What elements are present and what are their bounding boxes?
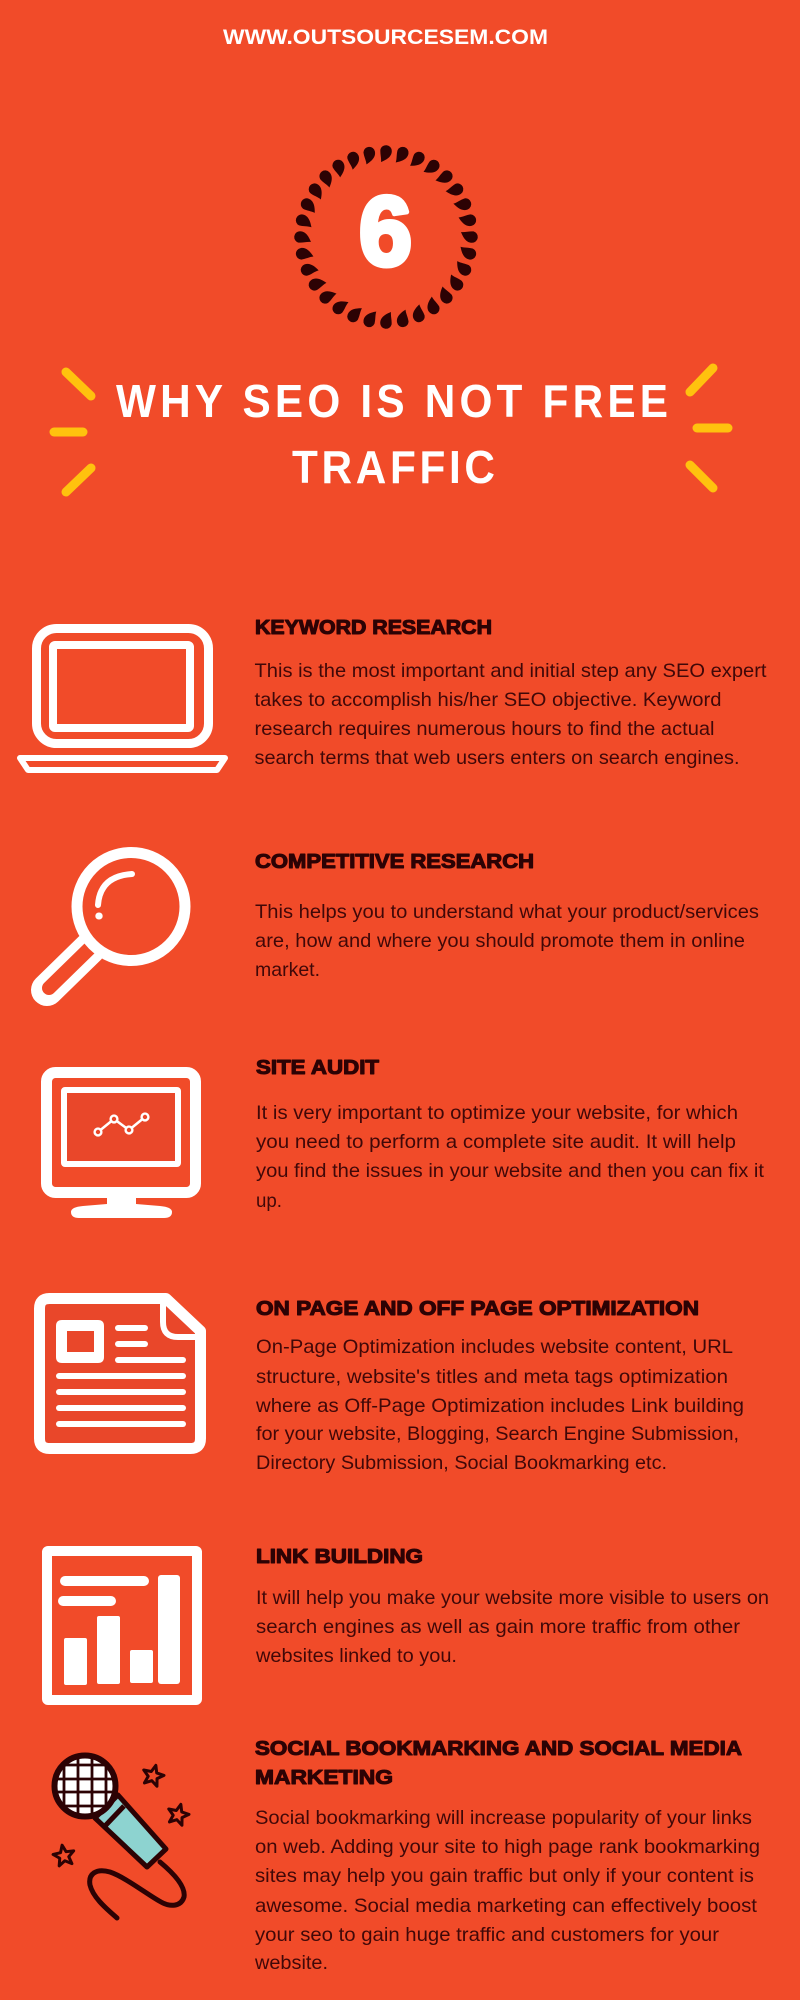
body text: awesome. Social media marketing can effectively boost: [255, 1895, 758, 1917]
icon: magnifying glass: [47, 852, 185, 990]
body text: This helps you to understand what your product/services: [255, 901, 759, 923]
icon: ring of drops: [294, 145, 478, 329]
icon: document: [40, 1298, 200, 1448]
website url: WWW.OUTSOURCESEM.COM: [223, 26, 548, 49]
panel: competitive research: [47, 851, 759, 990]
body text: It will help you make your website more visible to users on: [256, 1587, 769, 1609]
panel: link building: [47, 1546, 769, 1700]
body text: up.: [256, 1190, 282, 1212]
panel: keyword research: [20, 617, 767, 770]
body text: [255, 1336, 744, 1474]
panel: site audit: [46, 1057, 765, 1218]
icon: monitor with chart: [46, 1072, 196, 1218]
body text: your seo to gain huge traffic and customers for your: [255, 1924, 720, 1946]
title: [116, 376, 668, 493]
icon: microphone with stars: [50, 1750, 191, 1918]
panel: on page and off page optimization: [40, 1298, 744, 1474]
icon: laptop: [20, 628, 225, 770]
body text: [254, 1807, 760, 1974]
heading: SOCIAL BOOKMARKING AND SOCIAL MEDIA: [255, 1738, 742, 1760]
body text: search terms that web users enters on search engines.: [254, 747, 740, 769]
body text: This is the most important and initial step any SEO expert: [254, 660, 767, 682]
heading: ON PAGE AND OFF PAGE OPTIMIZATION: [256, 1298, 699, 1320]
heading: LINK BUILDING: [256, 1546, 423, 1568]
body text: search engines as well as gain more traffic from other: [256, 1616, 741, 1638]
body text: Directory Submission, Social Bookmarking etc.: [256, 1452, 667, 1474]
body text: websites linked to you.: [255, 1645, 457, 1667]
panel: social bookmarking and social media marketing: [50, 1738, 760, 1974]
heading: COMPETITIVE RESEARCH: [255, 851, 534, 873]
body text: [255, 1587, 769, 1667]
body text: On-Page Optimization includes website content, URL: [256, 1336, 733, 1358]
heading: KEYWORD RESEARCH: [255, 617, 492, 639]
title: TRAFFIC: [292, 442, 495, 493]
body text: It is very important to optimize your website, for which: [256, 1102, 738, 1124]
body text: you need to perform a complete site audit. It will help: [256, 1131, 736, 1153]
icon: bar chart report: [47, 1551, 197, 1700]
number badge: [294, 145, 478, 329]
body text: research requires numerous hours to find the actual: [254, 718, 714, 740]
title: WHY SEO IS NOT FREE: [116, 376, 668, 427]
body text: sites may help you gain traffic but only if your content is: [255, 1865, 754, 1887]
body text: market.: [255, 959, 320, 981]
body text: Social bookmarking will increase popularity of your links: [255, 1807, 752, 1829]
icon: yellow rays left: [54, 372, 91, 492]
body text: you find the issues in your website and then you can fix it: [256, 1160, 765, 1182]
body text: are, how and where you should promote them in online: [255, 930, 745, 952]
heading: [255, 1738, 742, 1789]
body text: where as Off-Page Optimization includes Link building: [255, 1395, 744, 1417]
number six: 6: [359, 176, 412, 286]
body text: for your website, Blogging, Search Engine Submission,: [256, 1423, 739, 1445]
body text: structure, website's titles and meta tags optimization: [256, 1366, 728, 1388]
heading: SITE AUDIT: [256, 1057, 379, 1079]
body text: takes to accomplish his/her SEO objective. Keyword: [254, 689, 722, 711]
body text: [256, 1102, 765, 1212]
heading: MARKETING: [255, 1767, 393, 1789]
body text: [255, 901, 759, 981]
icon: yellow rays right: [690, 368, 728, 488]
body text: [254, 660, 767, 769]
body text: on web. Adding your site to high page rank bookmarking: [255, 1836, 760, 1858]
body text: website.: [254, 1952, 328, 1974]
